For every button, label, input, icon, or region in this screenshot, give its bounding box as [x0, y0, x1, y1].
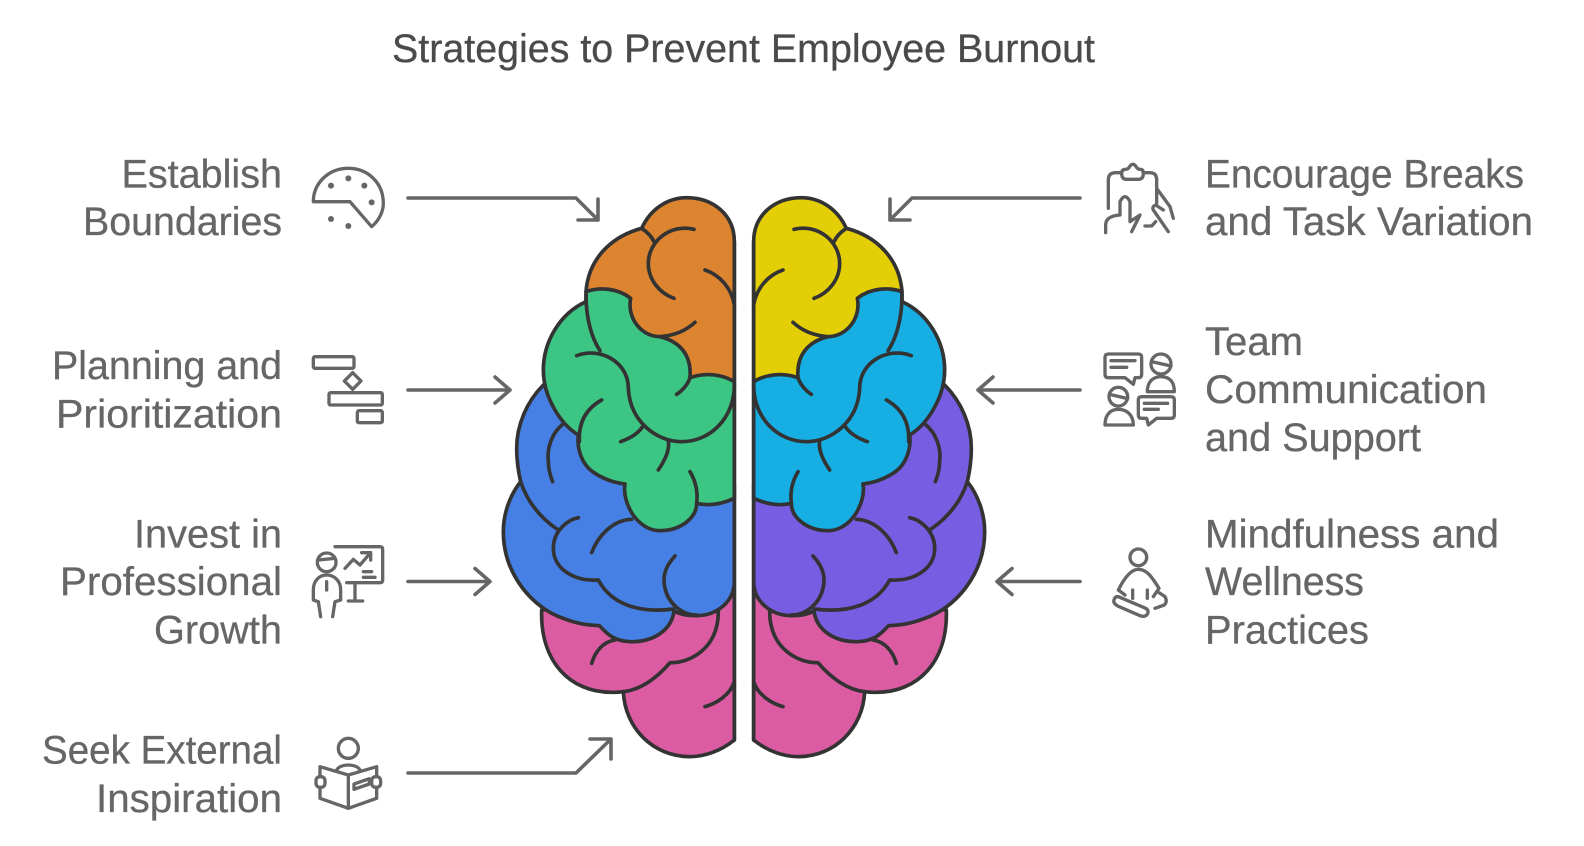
label: Seek External Inspiration: Inspiration — [96, 777, 282, 821]
label: Encourage Breaks and Task Variation: and Task Variation — [1205, 200, 1533, 244]
arrow: Planning and Prioritization — [408, 377, 510, 403]
label: Establish Boundaries: Boundaries — [83, 200, 282, 244]
label: Mindfulness and Wellness Practices — [1205, 512, 1499, 652]
label: Seek External Inspiration — [42, 728, 282, 821]
arrow: Encourage Breaks — [890, 198, 1080, 220]
arrow: Team Communication — [978, 377, 1080, 403]
lobe: purple — [754, 385, 985, 642]
icon: clipboard and hands — [1106, 164, 1173, 233]
icon: palette — [313, 168, 383, 229]
lobe: cyan — [754, 252, 945, 531]
label: Planning and Prioritization — [52, 344, 282, 436]
label: Encourage Breaks and Task Variation: Encourage Breaks — [1205, 152, 1524, 196]
lobe: yellow — [754, 198, 902, 382]
label: Team Communication and Support: Communication — [1205, 368, 1487, 412]
label: Planning and Prioritization: Prioritization — [56, 392, 282, 436]
lobe: pink right — [754, 585, 946, 757]
icon: presenter with chart — [313, 547, 383, 617]
label: Invest in Professional Growth: Growth — [154, 608, 282, 652]
brain folds: right — [754, 228, 967, 740]
brain folds: left — [521, 228, 734, 740]
arrow: Seek External Inspiration — [408, 739, 611, 773]
label: Planning and Prioritization: Planning and — [52, 344, 282, 388]
icon: reader with book — [316, 738, 381, 808]
label: Seek External Inspiration: Seek External — [42, 728, 282, 772]
lobe: blue — [503, 385, 734, 642]
lobe: green — [543, 252, 734, 531]
label: Invest in Professional Growth: Professional — [60, 560, 282, 604]
label: Mindfulness and Wellness Practices: Mindfulness and — [1205, 512, 1499, 556]
brain: left hemisphere — [503, 198, 734, 757]
label: Invest in Professional Growth: Invest in — [134, 512, 282, 556]
label: Encourage Breaks and Task Variation — [1205, 152, 1533, 244]
icon: team conversation — [1105, 354, 1174, 425]
arrow: Invest in Professional Growth — [408, 568, 490, 594]
brain: right hemisphere — [754, 198, 985, 757]
icon: meditating person — [1114, 549, 1166, 616]
label: Establish Boundaries — [83, 152, 282, 244]
label: Team Communication and Support: and Support — [1205, 416, 1421, 460]
label: Mindfulness and Wellness Practices: Wellness — [1205, 560, 1364, 604]
arrow: Mindfulness — [997, 568, 1080, 594]
lobe: orange — [586, 198, 734, 382]
label: Mindfulness and Wellness Practices: Practices — [1205, 608, 1369, 652]
label: Team Communication and Support — [1205, 320, 1487, 460]
lobe: pink — [542, 585, 734, 757]
label: Invest in Professional Growth — [60, 512, 282, 652]
arrow: Establish Boundaries — [408, 198, 598, 220]
label: Team Communication and Support: Team — [1205, 320, 1303, 364]
label: Establish Boundaries: Establish — [122, 152, 282, 196]
title: Strategies to Prevent Employee Burnout — [392, 27, 1095, 71]
icon: gantt chart — [313, 357, 382, 423]
